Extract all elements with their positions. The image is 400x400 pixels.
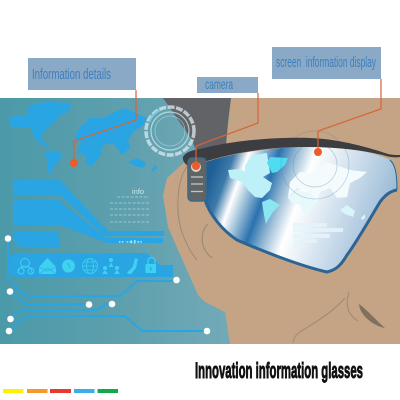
callout: information details [28, 58, 136, 167]
data flow bars [13, 180, 164, 248]
camera device [188, 158, 206, 201]
callout: camera [192, 76, 258, 170]
lens outline [205, 190, 397, 272]
glasses lens [203, 131, 397, 272]
callout: information details: Information details [32, 66, 111, 83]
icon: mail envelope [39, 258, 56, 274]
lens text lines [293, 223, 343, 248]
icon toolbar [10, 253, 173, 277]
lens right edge [390, 160, 397, 190]
teal background panel [0, 98, 235, 344]
HUD ring [146, 107, 194, 155]
icon: clock [62, 260, 75, 272]
skin face panel [163, 98, 400, 344]
callout: screen information display [272, 47, 381, 156]
icon: telephone [127, 258, 138, 274]
circuit lines with nodes [5, 235, 210, 334]
playback symbols: ▸▸ ▸◆▮◂◂ [119, 239, 142, 244]
color legend strip [3, 389, 118, 393]
icon: padlock [146, 258, 156, 273]
ear and face contour lines [178, 165, 358, 343]
background world map [8, 102, 157, 175]
nostril [359, 304, 385, 328]
glasses frame [183, 138, 400, 168]
dark hair [163, 98, 231, 156]
lens arc reflections [281, 131, 349, 199]
callout: camera: camera [205, 76, 233, 92]
icon: hierarchy people [102, 258, 120, 274]
icon: network people [18, 258, 34, 274]
info label and dashed lines [110, 187, 149, 222]
icon: globe [82, 258, 98, 274]
lens world map [228, 153, 367, 224]
info label and dashed lines: info [132, 187, 144, 196]
